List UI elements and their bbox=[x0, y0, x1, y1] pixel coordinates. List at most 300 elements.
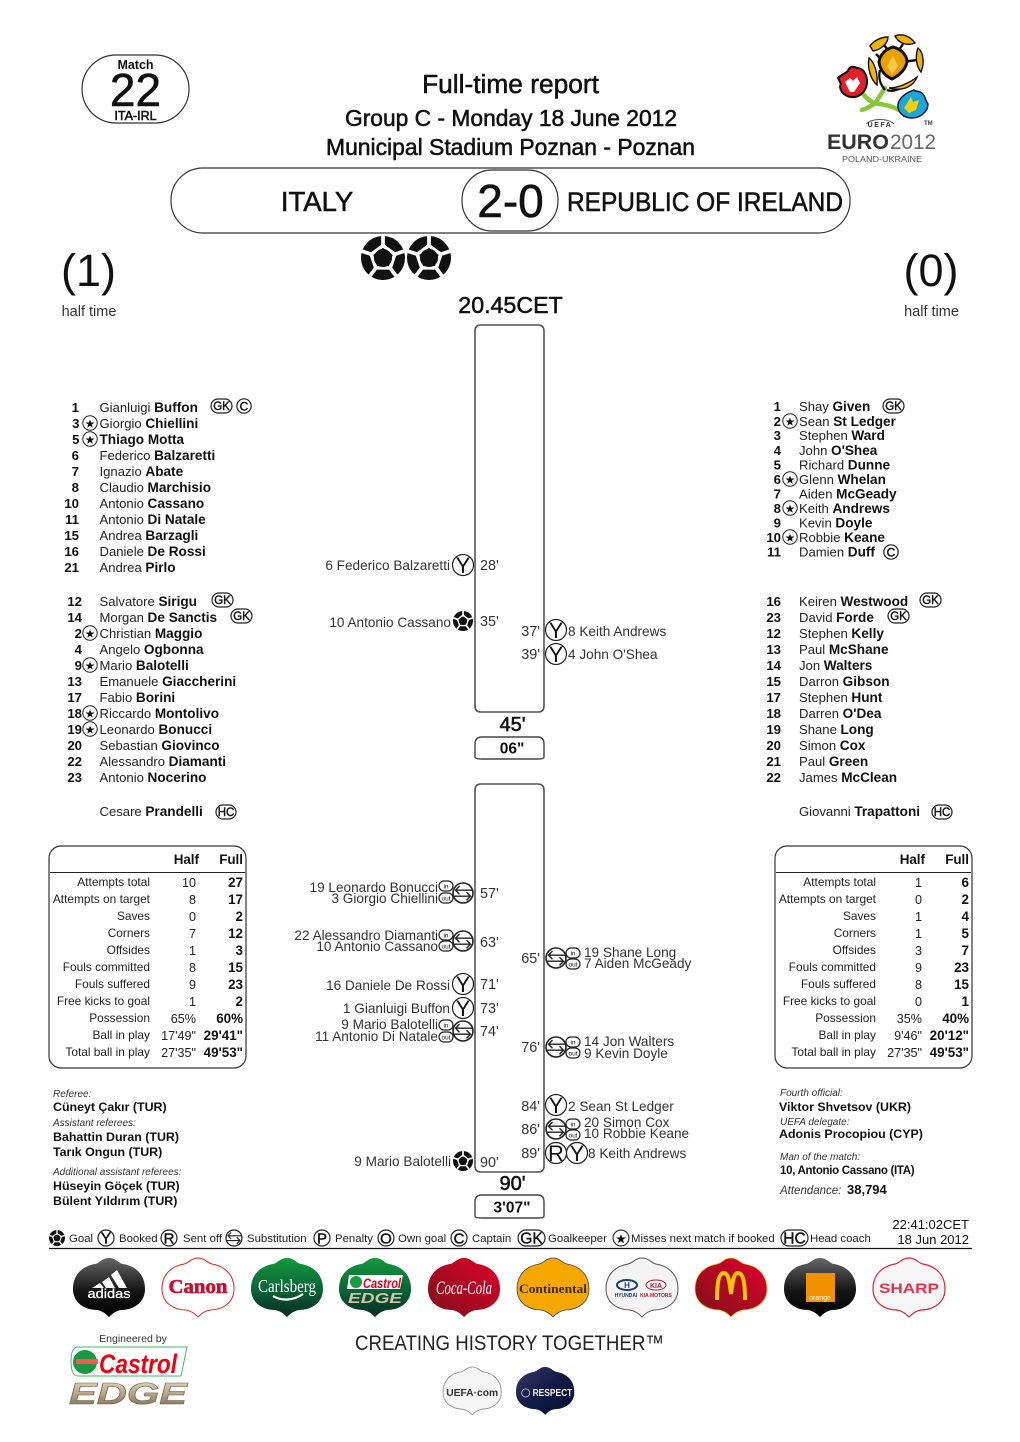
event: booking De Rossi 71': Y bbox=[456, 972, 471, 997]
logo: UEFA Euro 2012 bbox=[827, 35, 936, 164]
stats table: Ireland: 6 bbox=[962, 875, 969, 890]
event: substitution 57': 3 Giorgio Chiellini bbox=[331, 891, 438, 906]
event: booking O'Shea 39': 39' bbox=[521, 647, 540, 663]
event: substitution 63': 10 Antonio Cassano bbox=[316, 939, 438, 954]
badge: Respect: RESPECT bbox=[533, 1388, 572, 1399]
lineup: Italy starters: Gianluigi Buffon bbox=[100, 400, 198, 415]
lineup: Italy substitutes: Leonardo Bonucci bbox=[100, 722, 212, 737]
half-time score: Italy: (1) bbox=[61, 245, 116, 296]
stats table: Ireland: 23 bbox=[954, 960, 969, 975]
stats table: Ireland: 2 bbox=[962, 892, 969, 907]
second half stoppage bbox=[475, 1195, 544, 1218]
icon: goalkeeper: GK bbox=[213, 401, 230, 413]
slogan: CREATING HISTORY TOGETHER™ bbox=[355, 1332, 664, 1355]
lineup: Italy substitutes: 17 bbox=[67, 690, 82, 705]
event: substitution 57' bbox=[310, 880, 499, 906]
logo: UEFA Euro 2012: POLAND-UKRAINE bbox=[842, 155, 922, 164]
event: substitution 63' bbox=[294, 928, 499, 954]
event: booking O'Shea 39' bbox=[521, 642, 658, 667]
match officials: Bahattin Duran (TUR) bbox=[53, 1130, 179, 1144]
event: booking Balzaretti 28': 28' bbox=[480, 558, 499, 574]
event: substitution 86': 20 Simon Cox bbox=[584, 1115, 670, 1130]
event: goal Cassano 35': 10 Antonio Cassano bbox=[329, 615, 451, 630]
stats table: Ireland: 20'12" bbox=[930, 1028, 969, 1043]
lineup: Italy substitutes: 19 bbox=[67, 722, 82, 737]
lineup: Ireland starters: 6 bbox=[774, 472, 781, 487]
stats table: Italy: 1 bbox=[189, 995, 196, 1009]
lineup: Italy substitutes: Christian Maggio bbox=[100, 626, 202, 641]
title: Group C - Monday 18 June 2012 bbox=[345, 105, 677, 131]
logo: UEFA Euro 2012: 2012 bbox=[890, 131, 936, 154]
legend: Head coach bbox=[810, 1233, 871, 1245]
logo: UEFA Euro 2012: EURO bbox=[827, 131, 889, 154]
lineup: Italy starters: Federico Balzaretti bbox=[100, 448, 215, 463]
logo: UEFA Euro 2012: UEFA bbox=[868, 122, 892, 129]
icon: captain: C bbox=[240, 400, 249, 414]
lineup: Ireland substitutes: David Forde bbox=[799, 610, 874, 625]
lineup: Italy starters: 10 bbox=[64, 496, 79, 511]
stats table: Ireland: Corners bbox=[834, 926, 876, 940]
stats table: Ireland: Full bbox=[945, 852, 969, 867]
event: substitution 57': in bbox=[443, 884, 449, 890]
lineup: Italy substitutes: 12 bbox=[67, 594, 82, 609]
lineup: Ireland substitutes: 18 bbox=[766, 706, 781, 721]
event: goal Cassano 35': 35' bbox=[480, 614, 499, 630]
lineup: Italy substitutes bbox=[67, 593, 252, 785]
lineup: Ireland starters: 3 bbox=[774, 428, 781, 443]
half-time score: Ireland: (0) bbox=[904, 245, 958, 296]
lineup: Italy substitutes: 9 bbox=[75, 658, 82, 673]
event: booking Andrews 37': 8 Keith Andrews bbox=[568, 624, 666, 639]
lineup: Ireland starters: Aiden McGeady bbox=[799, 486, 897, 502]
half-time score: Italy: half time bbox=[62, 304, 116, 320]
timeline: second half bbox=[475, 784, 544, 1218]
lineup: Ireland substitutes: Darren O'Dea bbox=[799, 706, 882, 721]
sponsor: Hyundai Kia: HYUNDAI bbox=[615, 1293, 638, 1299]
lineup: Ireland substitutes: Darron Gibson bbox=[799, 674, 890, 689]
stats table: Ireland: Offsides bbox=[833, 943, 876, 957]
event: substitution 57': out bbox=[441, 896, 451, 902]
event: substitution 86' bbox=[521, 1115, 689, 1141]
stats table: Ireland: 1 bbox=[915, 876, 922, 890]
lineup: Ireland starters: 7 bbox=[774, 486, 781, 502]
lineup: Italy substitutes: 13 bbox=[67, 674, 82, 689]
lineup: Ireland starters: Stephen Ward bbox=[799, 428, 885, 443]
half-time score: Ireland bbox=[904, 245, 959, 320]
stats table: Ireland: Half bbox=[900, 852, 926, 867]
event: substitution 63': out bbox=[441, 944, 451, 950]
stats table: Italy: 27 bbox=[228, 875, 243, 890]
lineup: Ireland substitutes: Stephen Kelly bbox=[799, 626, 884, 641]
event: booking St Ledger 84': 2 Sean St Ledger bbox=[568, 1099, 674, 1114]
lineup: Italy starters: Andrea Pirlo bbox=[100, 560, 176, 575]
lineup: Ireland starters: 10 bbox=[766, 530, 781, 545]
event: booking St Ledger 84' bbox=[521, 1093, 674, 1118]
match officials: Bülent Yıldırım (TUR) bbox=[53, 1194, 177, 1208]
legend: Own goal bbox=[398, 1233, 446, 1245]
lineup: Ireland starters: Shay Given bbox=[799, 399, 870, 414]
lineup: Italy substitutes: 14 bbox=[67, 610, 83, 625]
lineup: Ireland substitutes bbox=[766, 593, 941, 785]
lineup: Italy starters: 7 bbox=[72, 464, 79, 479]
event: substitution 63': 22 Alessandro Diamanti bbox=[294, 928, 438, 943]
sponsor: McDonald's bbox=[695, 1258, 767, 1317]
icon: goalkeeper bbox=[883, 399, 904, 413]
lineup: Italy substitutes: Fabio Borini bbox=[100, 690, 175, 705]
other officials and attendance: Man of the match: bbox=[780, 1152, 860, 1163]
stats table: Italy: Ball in play bbox=[92, 1028, 150, 1042]
icon: goalkeeper: GK bbox=[233, 611, 250, 623]
lineup: Italy substitutes: 18 bbox=[67, 706, 82, 721]
lineup: Ireland substitutes: 16 bbox=[766, 594, 781, 609]
event: booking Buffon 73' bbox=[343, 996, 499, 1021]
sponsor: Carlsberg: Carlsberg bbox=[258, 1276, 316, 1296]
stats table: Ireland: Attempts on target bbox=[779, 892, 877, 906]
legend: Sent off bbox=[183, 1233, 223, 1245]
legend: O bbox=[380, 1230, 392, 1248]
head coach: Italy: HC bbox=[218, 807, 234, 819]
second half end time: 90' bbox=[499, 1173, 526, 1195]
lineup: Ireland substitutes: Paul Green bbox=[799, 754, 868, 769]
stats table: Italy: Offsides bbox=[107, 943, 150, 957]
lineup: Ireland starters: 11 bbox=[767, 544, 781, 560]
icon: goalkeeper bbox=[231, 609, 252, 623]
event: sent off Andrews 89': 89' bbox=[521, 1146, 540, 1162]
stats table: Italy: Total ball in play bbox=[65, 1045, 150, 1059]
match officials: Additional assistant referees: bbox=[52, 1167, 182, 1178]
other officials and attendance: Adonis Procopiou (CYP) bbox=[779, 1127, 923, 1141]
lineup: Ireland starters: Sean St Ledger bbox=[799, 414, 897, 429]
stats table: Ireland: 0 bbox=[915, 893, 922, 907]
event: booking Buffon 73': Y bbox=[456, 996, 471, 1021]
stats table: Ireland: Possession bbox=[815, 1011, 876, 1025]
event: booking O'Shea 39': Y bbox=[549, 642, 564, 667]
match officials: Tarık Ongun (TUR) bbox=[53, 1145, 162, 1159]
stats table: Italy: 0 bbox=[189, 910, 196, 924]
head coach: Ireland: Giovanni Trapattoni bbox=[799, 804, 920, 819]
sponsor: Sharp bbox=[873, 1258, 945, 1317]
report timestamp bbox=[892, 1217, 969, 1247]
event: sent off Andrews 89': R bbox=[548, 1141, 564, 1166]
lineup: Italy starters: 6 bbox=[72, 448, 79, 463]
lineup: Ireland substitutes: 22 bbox=[766, 770, 781, 785]
timeline: first half bbox=[475, 325, 544, 759]
match number badge: Match bbox=[117, 58, 154, 72]
lineup: Ireland starters: Richard Dunne bbox=[799, 458, 890, 472]
sponsor: Coca-Cola bbox=[428, 1258, 500, 1317]
event: substitution 63': 63' bbox=[480, 935, 499, 951]
stats table: Ireland: Fouls suffered bbox=[801, 977, 876, 991]
stats table: Ireland: Saves bbox=[843, 909, 876, 923]
event: booking O'Shea 39': 4 John O'Shea bbox=[568, 647, 658, 662]
event: substitution 76' bbox=[521, 1034, 674, 1061]
score bar bbox=[171, 168, 850, 233]
logo: UEFA Euro 2012: TM bbox=[924, 121, 933, 127]
sponsor: Castrol Edge: Castrol bbox=[363, 1275, 402, 1291]
Engineered by Castrol Edge logo: EDGE bbox=[69, 1376, 189, 1411]
stats table: Ireland: 40% bbox=[942, 1011, 969, 1026]
lineup: Ireland substitutes: 21 bbox=[766, 754, 781, 769]
event: booking Buffon 73': 73' bbox=[480, 1001, 499, 1017]
event: substitution 76': 76' bbox=[521, 1040, 540, 1056]
sponsor: Hyundai Kia: H bbox=[624, 1281, 630, 1290]
match officials: Cüneyt Çakır (TUR) bbox=[53, 1100, 167, 1114]
stats table: Ireland: Attempts total bbox=[803, 875, 876, 889]
lineup: Ireland starters: John O'Shea bbox=[799, 443, 878, 458]
lineup: Ireland substitutes: 13 bbox=[766, 642, 781, 657]
event: substitution 65': 19 Shane Long bbox=[584, 945, 676, 960]
stats table: Italy: 49'53" bbox=[204, 1045, 243, 1060]
stats table: Ireland: 27'35" bbox=[887, 1046, 922, 1060]
stats table: Italy: Half bbox=[174, 852, 200, 867]
event: substitution 74': 9 Mario Balotelli bbox=[341, 1017, 438, 1032]
event: booking Balzaretti 28' bbox=[325, 553, 499, 578]
lineup: Italy starters: 15 bbox=[64, 528, 79, 543]
lineup: Ireland substitutes: 14 bbox=[766, 658, 782, 673]
stats table: Italy: 2 bbox=[236, 994, 243, 1009]
icon: captain: C bbox=[887, 546, 896, 560]
event: substitution 86': 10 Robbie Keane bbox=[584, 1126, 689, 1141]
report timestamp: 22:41:02CET bbox=[892, 1217, 969, 1232]
match number badge: 22 bbox=[110, 64, 161, 116]
stats table: Italy: 17'49" bbox=[161, 1029, 196, 1043]
event: substitution 86': out bbox=[568, 1132, 578, 1140]
event: substitution 74': 74' bbox=[480, 1024, 499, 1040]
lineup: Ireland starters: Kevin Doyle bbox=[799, 516, 873, 530]
first half stoppage: 06" bbox=[500, 740, 524, 758]
sponsor: Coca-Cola: Coca-Cola bbox=[436, 1278, 492, 1299]
legend: GK bbox=[520, 1230, 543, 1248]
icon: goalkeeper bbox=[920, 593, 941, 607]
lineup: Italy starters: 1 bbox=[72, 400, 79, 415]
lineup: Ireland substitutes: 23 bbox=[766, 610, 781, 625]
stats table: Italy: Saves bbox=[117, 909, 150, 923]
stats table: Ireland: 9 bbox=[915, 961, 922, 975]
stats table: Italy: 12 bbox=[228, 926, 243, 941]
head coach: Ireland: HC bbox=[934, 807, 950, 819]
event: booking De Rossi 71' bbox=[326, 972, 499, 997]
stats table: Ireland: Total ball in play bbox=[791, 1045, 876, 1059]
lineup: Italy substitutes: Antonio Nocerino bbox=[100, 770, 206, 785]
goal balls bbox=[361, 236, 451, 280]
lineup: Ireland starters: Damien Duff bbox=[799, 544, 875, 560]
stats table: Italy: Full bbox=[219, 852, 243, 867]
lineup: Ireland substitutes: 15 bbox=[766, 674, 781, 689]
team: Republic of Ireland: REPUBLIC OF IRELAND bbox=[567, 187, 843, 217]
lineup: Ireland starters: 4 bbox=[774, 443, 782, 458]
stats table: Italy: 15 bbox=[228, 960, 244, 975]
stats table: Italy: Attempts total bbox=[77, 875, 150, 889]
lineup: Italy starters: Antonio Cassano bbox=[100, 496, 204, 511]
lineup: Ireland starters bbox=[766, 399, 904, 560]
lineup: Italy substitutes: Riccardo Montolivo bbox=[100, 706, 219, 721]
sponsor: Continental: Continental bbox=[519, 1281, 587, 1296]
lineup: Italy starters: 5 bbox=[72, 432, 80, 447]
event: booking Balzaretti 28': Y bbox=[456, 553, 471, 578]
second half stoppage: 3'07" bbox=[494, 1200, 530, 1216]
icon: goalkeeper bbox=[211, 399, 232, 413]
lineup: Italy substitutes: Mario Balotelli bbox=[100, 658, 189, 673]
legend: Booked bbox=[119, 1233, 158, 1245]
half-time score: Ireland: half time bbox=[904, 304, 959, 320]
stats table: Italy: 9 bbox=[189, 978, 196, 992]
event: substitution 86': in bbox=[570, 1122, 576, 1128]
event: goal Balotelli 90': 90' bbox=[480, 1155, 499, 1171]
match number badge bbox=[82, 55, 189, 123]
title: Municipal Stadium Poznan - Poznan bbox=[326, 134, 695, 160]
event: substitution 74': 11 Antonio Di Natale bbox=[315, 1029, 438, 1044]
lineup: Ireland substitutes: 20 bbox=[766, 738, 781, 753]
event: booking De Rossi 71': 16 Daniele De Rossi bbox=[326, 978, 450, 993]
legend: Penalty bbox=[335, 1233, 373, 1245]
event: booking Buffon 73': 1 Gianluigi Buffon bbox=[343, 1001, 450, 1016]
event: booking De Rossi 71': 71' bbox=[480, 977, 499, 993]
stats table: Italy: 8 bbox=[189, 893, 196, 907]
lineup: Italy starters: Daniele De Rossi bbox=[100, 544, 206, 559]
icon: goalkeeper: GK bbox=[922, 595, 939, 607]
sponsor: Hyundai Kia: KIA MOTORS bbox=[640, 1293, 672, 1299]
sponsor: Hyundai Kia: KIA bbox=[650, 1283, 662, 1290]
stats table: Italy: 17 bbox=[228, 892, 243, 907]
head coach: Italy: Cesare Prandelli bbox=[100, 804, 203, 819]
match officials: Hüseyin Göçek (TUR) bbox=[53, 1179, 180, 1193]
lineup: Ireland substitutes: Paul McShane bbox=[799, 642, 889, 657]
first half stoppage bbox=[475, 737, 544, 759]
legend: P bbox=[317, 1230, 327, 1248]
other officials and attendance: Attendance: bbox=[779, 1185, 841, 1197]
lineup: Italy substitutes: Angelo Ogbonna bbox=[100, 642, 204, 657]
score: 2-0 bbox=[477, 175, 544, 227]
event: substitution 74': in bbox=[443, 1022, 449, 1030]
lineup: Italy starters: 3 bbox=[72, 416, 80, 431]
event: substitution 74' bbox=[315, 1017, 499, 1044]
other officials and attendance: UEFA delegate: bbox=[780, 1117, 850, 1128]
event: substitution 76': 14 Jon Walters bbox=[584, 1034, 674, 1049]
half-time score: Italy bbox=[61, 245, 116, 320]
lineup: Italy substitutes: 4 bbox=[75, 642, 83, 657]
other officials and attendance: Viktor Shvetsov (UKR) bbox=[779, 1100, 911, 1114]
kick-off time: 20.45CET bbox=[458, 292, 563, 318]
legend: Y bbox=[101, 1230, 112, 1248]
lineup: Italy substitutes: Alessandro Diamanti bbox=[100, 754, 226, 769]
legend: Substitution bbox=[247, 1233, 307, 1245]
other officials and attendance: Fourth official: bbox=[780, 1088, 843, 1099]
stats table: Ireland: 1 bbox=[915, 927, 922, 941]
stats table: Ireland: 7 bbox=[962, 943, 969, 958]
lineup: Ireland substitutes: Jon Walters bbox=[799, 658, 872, 673]
lineup: Italy starters: 8 bbox=[72, 480, 79, 495]
lineup: Italy starters bbox=[64, 399, 251, 575]
score bbox=[462, 170, 558, 231]
sponsor: Sharp: SHARP bbox=[879, 1280, 939, 1296]
stats table: Italy: Possession bbox=[89, 1011, 150, 1025]
icon: goalkeeper bbox=[888, 609, 909, 623]
stats table: Ireland: 35% bbox=[897, 1012, 922, 1026]
lineup: Ireland substitutes: 12 bbox=[766, 626, 781, 641]
event: booking Andrews 37' bbox=[521, 618, 666, 643]
lineup: Italy starters: Thiago Motta bbox=[100, 432, 185, 447]
lineup: Italy starters: Giorgio Chiellini bbox=[100, 416, 198, 431]
stats table: Ireland: 3 bbox=[915, 944, 922, 958]
event: substitution 65': 65' bbox=[521, 951, 540, 967]
icon: captain bbox=[884, 545, 898, 560]
title bbox=[326, 69, 695, 160]
stats table: Ireland: Ball in play bbox=[818, 1028, 876, 1042]
lineup: Ireland starters: 5 bbox=[774, 458, 781, 472]
team: Italy: ITALY bbox=[281, 186, 353, 217]
stats table: Italy: 60% bbox=[216, 1011, 243, 1026]
lineup: Ireland starters: 9 bbox=[774, 516, 781, 530]
title: Full-time report bbox=[422, 69, 600, 99]
report timestamp: 18 Jun 2012 bbox=[897, 1232, 969, 1247]
legend: R bbox=[164, 1230, 175, 1248]
stats table: Ireland: 15 bbox=[954, 977, 970, 992]
lineup: Ireland starters: Robbie Keane bbox=[799, 530, 885, 545]
lineup: Ireland substitutes: Keiren Westwood bbox=[799, 594, 908, 609]
lineup: Italy starters: 16 bbox=[64, 544, 79, 559]
sponsor: Hyundai Kia bbox=[606, 1258, 678, 1317]
lineup: Ireland starters: Glenn Whelan bbox=[799, 472, 886, 487]
lineup: Italy starters: 21 bbox=[64, 560, 79, 575]
event: substitution 86': 86' bbox=[521, 1122, 540, 1138]
lineup: Ireland substitutes: 19 bbox=[766, 722, 781, 737]
legend: Goal bbox=[69, 1233, 93, 1245]
event: substitution 76': in bbox=[570, 1040, 576, 1046]
stats table: Italy: Corners bbox=[108, 926, 150, 940]
event: substitution 57': 19 Leonardo Bonucci bbox=[310, 880, 438, 895]
Engineered by Castrol Edge logo: Engineered by bbox=[99, 1333, 168, 1345]
event: booking Balzaretti 28': 6 Federico Balzaretti bbox=[325, 558, 450, 573]
other officials and attendance: 10, Antonio Cassano (ITA) bbox=[780, 1165, 915, 1177]
match number badge: ITA-IRL bbox=[114, 109, 157, 123]
legend: C bbox=[454, 1230, 465, 1248]
event: booking St Ledger 84': Y bbox=[549, 1093, 564, 1118]
event: substitution 63': in bbox=[443, 932, 449, 940]
legend: Misses next match if booked bbox=[631, 1233, 775, 1245]
legend bbox=[49, 1230, 871, 1248]
lineup: Ireland substitutes: Stephen Hunt bbox=[799, 690, 883, 705]
event: goal Balotelli 90' bbox=[354, 1151, 499, 1171]
icon: goalkeeper: GK bbox=[890, 611, 907, 623]
lineup: Italy starters: Ignazio Abate bbox=[100, 464, 184, 479]
sponsor: Orange: orange bbox=[809, 1295, 831, 1302]
stats table: Italy: 8 bbox=[189, 961, 196, 975]
icon: goalkeeper bbox=[212, 593, 233, 607]
badge: UEFA.com: UEFA·com bbox=[446, 1388, 498, 1399]
legend: Goalkeeper bbox=[548, 1233, 607, 1245]
Engineered by Castrol Edge logo: Castrol bbox=[99, 1349, 177, 1379]
other officials and attendance bbox=[779, 1088, 923, 1197]
legend: HC bbox=[783, 1230, 806, 1248]
event: goal Cassano 35' bbox=[329, 611, 499, 631]
lineup: Ireland substitutes: Simon Cox bbox=[799, 738, 866, 753]
lineup: Italy starters: Claudio Marchisio bbox=[100, 480, 211, 495]
event: booking St Ledger 84': 84' bbox=[521, 1099, 540, 1115]
stats table: Ireland: 5 bbox=[962, 926, 970, 941]
icon: captain bbox=[237, 399, 251, 414]
lineup: Italy substitutes: 2 bbox=[75, 626, 82, 641]
lineup: Italy starters: Antonio Di Natale bbox=[100, 512, 206, 527]
icon: goalkeeper: GK bbox=[214, 595, 231, 607]
sponsor: Continental bbox=[517, 1258, 589, 1317]
stats table: Ireland: 9'46" bbox=[894, 1029, 922, 1043]
sponsor: Canon bbox=[162, 1258, 234, 1317]
event: substitution 65': in bbox=[570, 950, 576, 958]
sponsor: adidas bbox=[73, 1258, 145, 1317]
sponsor: Castrol Edge: EDGE bbox=[348, 1290, 403, 1307]
stats table: Italy: 10 bbox=[182, 876, 196, 890]
Engineered by Castrol Edge logo bbox=[69, 1333, 189, 1411]
